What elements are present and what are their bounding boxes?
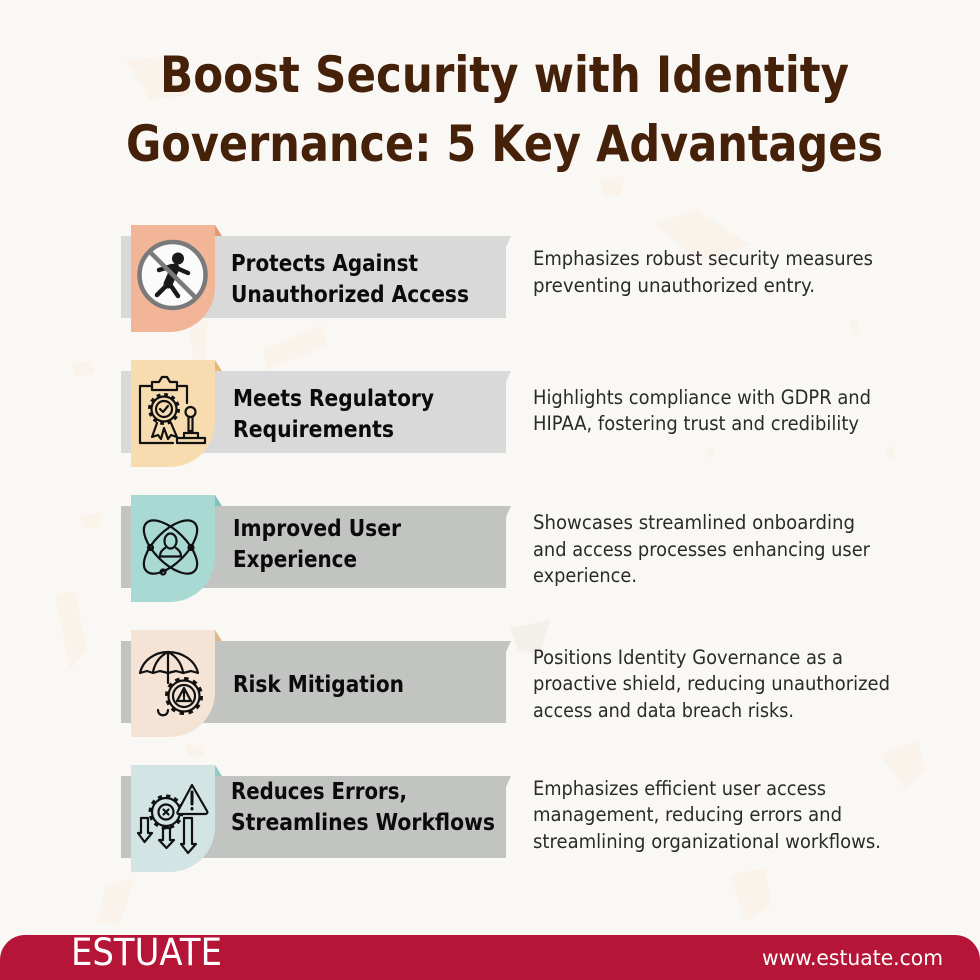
icon: clipboard with badge and stamp: [140, 377, 205, 443]
text block: errors description: management, reducing errors and: [533, 803, 842, 826]
text block: user experience description: [533, 511, 871, 587]
panel: meets regulatory requirements: Meets Regulatory: [233, 386, 434, 412]
panel: meets regulatory requirements: [121, 360, 511, 467]
panel: risk mitigation: Risk Mitigation: [233, 672, 404, 698]
panel: improved user experience: Experience: [233, 547, 357, 573]
icon: gear warning arrows: [138, 785, 207, 853]
panel: meets regulatory requirements: Requirements: [233, 417, 394, 443]
footer bar: [0, 931, 980, 980]
title: Governance: 5 Key Advantages: [126, 115, 883, 173]
footer bar: ESTUATE: [71, 931, 222, 974]
text block: risk description: [533, 646, 890, 722]
panel: improved user experience: Improved User: [233, 516, 402, 542]
panel: reduces errors streamlines workflows: Streamlines Workflows: [231, 810, 495, 836]
panel: protects against unauthorized access: Protects Against: [231, 251, 418, 277]
footer bar: www.estuate.com: [762, 946, 943, 970]
panel: risk mitigation: [121, 630, 511, 737]
text block: risk description: proactive shield, reducing unauthorized: [533, 672, 890, 695]
text block: protects description: Emphasizes robust security measures: [533, 247, 873, 270]
icon: user in atom orbits: [135, 512, 206, 582]
icon: no entry pedestrian: [140, 242, 206, 308]
icon: umbrella with gear warning: [140, 652, 202, 715]
text block: regulatory description: [533, 386, 871, 435]
text block: regulatory description: Highlights compliance with GDPR and: [533, 386, 871, 409]
text block: protects description: [533, 247, 873, 297]
title: [126, 46, 883, 173]
panel: improved user experience: [121, 495, 511, 602]
text block: errors description: streamlining organizational workflows.: [533, 830, 881, 853]
panel: protects against unauthorized access: [121, 225, 511, 332]
text block: user experience description: Showcases streamlined onboarding: [533, 511, 855, 534]
text block: risk description: Positions Identity Governance as a: [533, 646, 843, 669]
text block: errors description: [533, 777, 881, 853]
title: Boost Security with Identity: [160, 46, 849, 104]
text block: protects description: preventing unauthorized entry.: [533, 274, 815, 297]
text block: user experience description: and access processes enhancing user: [533, 538, 871, 561]
text block: regulatory description: HIPAA, fostering trust and credibility: [533, 412, 859, 435]
text block: user experience description: experience.: [533, 564, 637, 587]
panel: reduces errors streamlines workflows: [121, 765, 511, 872]
panel: reduces errors streamlines workflows: Reduces Errors,: [231, 779, 407, 805]
text block: errors description: Emphasizes efficient user access: [533, 777, 826, 800]
panel: protects against unauthorized access: Unauthorized Access: [231, 282, 469, 308]
text block: risk description: access and data breach risks.: [533, 699, 794, 722]
